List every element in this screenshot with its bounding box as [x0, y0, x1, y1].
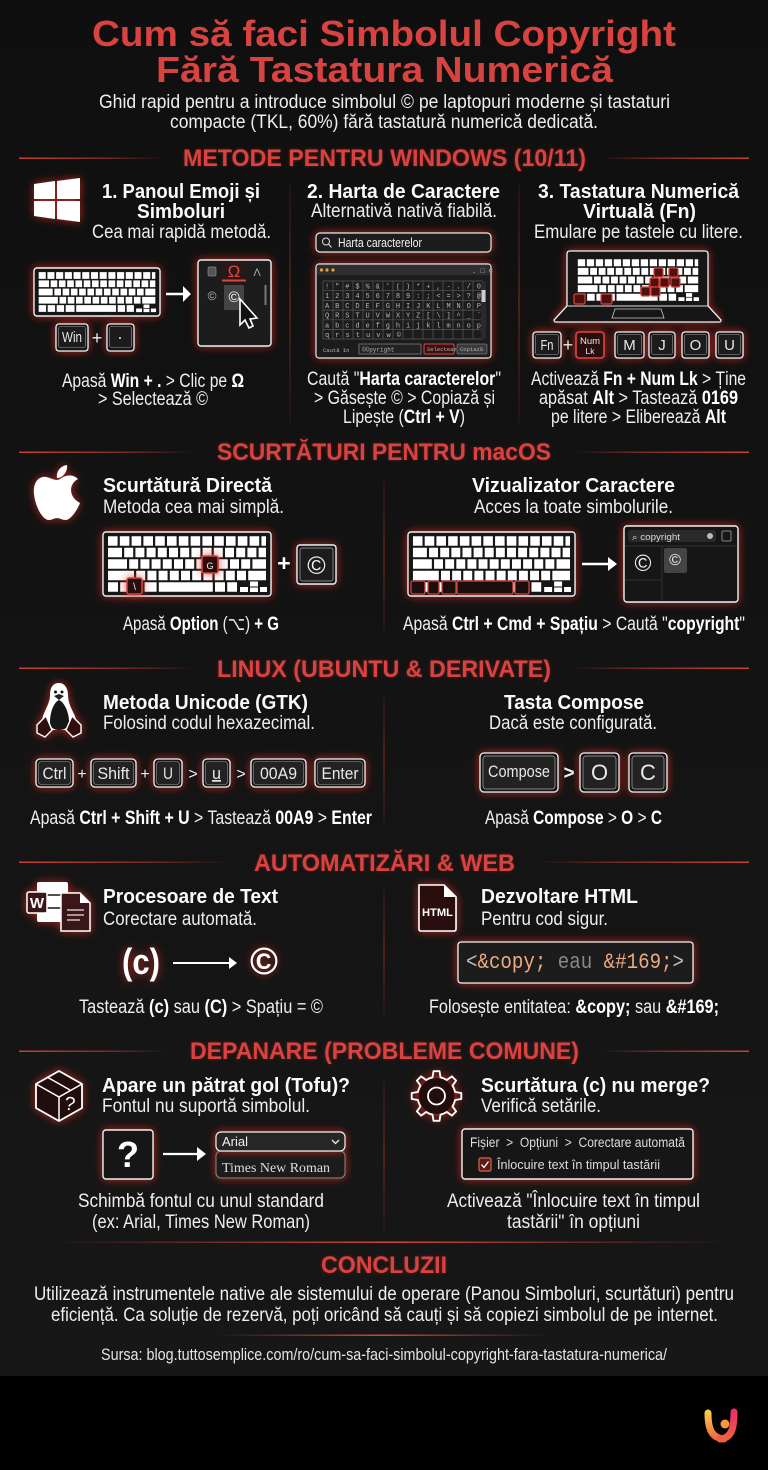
- keys: Ctrl Shift U u 00A9 Enter: [36, 759, 365, 787]
- Compose heading: Tasta Compose: [504, 692, 644, 714]
- tofu square: [103, 1130, 153, 1179]
- direct shortcut heading: Metoda cea mai simplă.: [103, 497, 284, 518]
- instruction: Unicode: Apasă Ctrl + Shift + U > Tastează 00A9 > Enter: [30, 808, 372, 829]
- tofu heading: Apare un pătrat gol (Tofu)?: [102, 1075, 350, 1097]
- emoji panel: Ω: [228, 262, 240, 281]
- HTML heading: [481, 886, 638, 930]
- keys: Fn + Num Lk M J O U: M: [623, 337, 636, 354]
- keyboard illustration: [34, 268, 160, 316]
- character map window: qrstuvw©: [325, 331, 402, 340]
- keys: Ctrl Shift U u 00A9 Enter: >: [236, 766, 246, 783]
- word processors heading: Corectare automată.: [103, 909, 257, 930]
- subtitle: compacte (TKL, 60%) fără tastatură numerică dedicată.: [170, 112, 598, 133]
- code box: <&copy; eau &#169;>: [466, 950, 684, 975]
- tofu heading: [102, 1075, 350, 1117]
- tofu square: ?: [117, 1134, 139, 1175]
- keys: Ctrl Shift U u 00A9 Enter: Enter: [322, 764, 359, 783]
- conclusions text: [34, 1284, 734, 1326]
- method 3 heading: [534, 181, 743, 243]
- keys: Fn + Num Lk M J O U: +: [563, 335, 573, 355]
- settings box: Înlocuire text în timpul tastării: [496, 1157, 660, 1172]
- icon: box with question mark: ?: [63, 1093, 76, 1116]
- panel: Windows: [19, 145, 749, 428]
- character viewer heading: [472, 475, 675, 518]
- source line: Sursa: blog.tuttosemplice.com/ro/cum-sa-faci-simbolul-copyright-fara-tastatura-numerica/: [101, 1346, 667, 1364]
- HTML heading: Pentru cod sigur.: [481, 909, 608, 930]
- instruction: tofu: Schimbă fontul cu unul standard: [78, 1191, 324, 1212]
- keyboard with Ctrl Cmd Space: [408, 532, 575, 596]
- instruction: HTML: Folosește entitatea: &copy; sau &#169;: [429, 997, 719, 1018]
- emoji panel: Λ: [253, 267, 261, 279]
- character map window: Copiază: [460, 346, 484, 353]
- subtitle: [99, 92, 670, 133]
- font dropdown: Arial: [222, 1134, 248, 1149]
- icon: cursor: [240, 299, 257, 328]
- character viewer panel: ⌕ copyright: [632, 532, 681, 542]
- character map window: QRSTUVWXYZ[\]^_`: [325, 312, 481, 321]
- instruction: settings: [447, 1190, 700, 1233]
- character map window: ABCDEFGHIJKLMNOP: [325, 303, 481, 311]
- panel: Linux: [19, 656, 749, 829]
- instruction: settings: tastării" în opțiuni: [507, 1212, 640, 1233]
- panel: macOS: [19, 438, 749, 635]
- method 2 heading: [307, 181, 500, 222]
- keys: Win + .: [56, 324, 134, 351]
- word processors heading: Procesoare de Text: [103, 886, 278, 908]
- keyboard with Option and G: G: [206, 561, 214, 571]
- instruction: Option + G: Apasă Option (⌥) + G: [123, 614, 279, 635]
- method 3 heading: 3. Tastatura Numerică: [538, 181, 740, 203]
- keys: Win + .: +: [92, 328, 102, 348]
- key: copyright: [297, 545, 336, 584]
- emoji panel: ©: [208, 289, 217, 303]
- keys: Fn + Num Lk M J O U: U: [724, 337, 735, 354]
- keyboard with Option and G: \: [133, 582, 136, 593]
- heading: Linux: LINUX (UBUNTU & DERIVATE): [217, 656, 551, 683]
- method 1 heading: 1. Panoul Emoji și: [102, 181, 260, 203]
- icon: Apple logo: [34, 465, 80, 520]
- settings box: Fișier > Opțiuni > Corectare automată: [470, 1135, 685, 1150]
- method 1 heading: [92, 181, 271, 243]
- character map window: abcdefghijklmnop: [325, 322, 481, 330]
- character map window: Caută în: [323, 347, 349, 354]
- keys: Ctrl Shift U u 00A9 Enter: +: [77, 766, 87, 783]
- icon: gear: [412, 1071, 461, 1121]
- instruction 2: Lipește (Ctrl + V): [343, 407, 465, 428]
- instruction: Ctrl Cmd Space: Apasă Ctrl + Cmd + Spațiu > Caută "copyright": [403, 614, 745, 635]
- character map window: 123456789:;<=>?@: [325, 293, 482, 301]
- arrow: [166, 286, 191, 302]
- autocorrect illustration: (c): [122, 941, 160, 982]
- settings box: [462, 1129, 693, 1179]
- Unicode method heading: Folosind codul hexazecimal.: [103, 713, 315, 734]
- character viewer panel: [624, 526, 738, 602]
- plus: +: [277, 550, 291, 576]
- keys: Ctrl Shift U u 00A9 Enter: u: [212, 764, 221, 783]
- direct shortcut heading: [103, 475, 284, 518]
- instruction 3: [531, 369, 746, 428]
- keys: Fn + Num Lk M J O U: Fn: [540, 337, 554, 354]
- keys: Win + .: Win: [62, 329, 82, 346]
- keys: Compose O C: C: [640, 760, 656, 785]
- keys: Fn + Num Lk M J O U: [533, 332, 743, 358]
- emoji panel: [198, 260, 271, 346]
- keys: Win + .: .: [118, 324, 122, 343]
- subtitle: Ghid rapid pentru a introduce simbolul © pe laptopuri moderne și tastaturi: [99, 92, 670, 113]
- arrow: [163, 1147, 206, 1161]
- keys: Ctrl Shift U u 00A9 Enter: +: [140, 766, 150, 783]
- keys: Fn + Num Lk M J O U: Lk: [586, 346, 595, 356]
- keys: Compose O C: O: [591, 760, 608, 785]
- keys: Ctrl Shift U u 00A9 Enter: 00A9: [260, 764, 297, 783]
- character viewer heading: Acces la toate simbolurile.: [474, 497, 673, 518]
- Unicode method heading: Metoda Unicode (GTK): [103, 692, 308, 714]
- search box: Harta caracterelor: [338, 235, 423, 250]
- autocorrect fix heading: [481, 1075, 710, 1117]
- tofu heading: Fontul nu suportă simbolul.: [102, 1096, 310, 1117]
- keys: Ctrl Shift U u 00A9 Enter: >: [188, 766, 198, 783]
- instruction 2: [307, 369, 501, 428]
- font dropdown: [216, 1132, 345, 1178]
- instruction: autocorrect: Tastează (c) sau (C) > Spațiu = ©: [79, 997, 323, 1018]
- search box: [316, 233, 491, 252]
- word processors heading: [103, 886, 278, 930]
- keys: Compose O C: [480, 753, 667, 792]
- icon: Word and document: W: [30, 895, 45, 912]
- title: [92, 13, 676, 90]
- font dropdown: Times New Roman: [222, 1161, 330, 1176]
- title: Cum să faci Simbolul Copyright: [92, 13, 676, 54]
- method 3 heading: Virtuală (Fn): [583, 201, 696, 223]
- character map window: ©©pyright: [362, 346, 394, 354]
- keys: Fn + Num Lk M J O U: J: [658, 337, 666, 354]
- panel: Troubleshooting: [19, 1038, 749, 1233]
- character map window: Selectează: [427, 346, 461, 353]
- icon: HTML file: [419, 885, 456, 931]
- autocorrect fix heading: Verifică setările.: [481, 1096, 601, 1117]
- autocorrect illustration: [122, 941, 278, 983]
- instruction: settings: Activează "Înlocuire text în timpul: [447, 1190, 700, 1212]
- heading: Automation: AUTOMATIZĂRI & WEB: [254, 849, 515, 877]
- icon: Tux penguin: [37, 683, 81, 737]
- Compose heading: Dacă este configurată.: [489, 713, 657, 734]
- heading: macOS: SCURTĂTURI PENTRU macOS: [217, 438, 551, 466]
- instruction 1: Apasă Win + . > Clic pe Ω: [62, 371, 244, 392]
- heading: Windows: METODE PENTRU WINDOWS (10/11): [183, 145, 586, 172]
- character viewer heading: Vizualizator Caractere: [472, 475, 675, 497]
- keys: Ctrl Shift U u 00A9 Enter: Shift: [98, 764, 130, 783]
- instruction: tofu: [78, 1191, 324, 1233]
- character viewer panel: ©: [669, 552, 681, 569]
- character map window: !"#$%&'()*+,-./0: [325, 284, 481, 292]
- instruction: tofu: (ex: Arial, Times New Roman): [92, 1212, 310, 1233]
- icon: Word and document: [27, 882, 90, 931]
- panel: Automation and web: [19, 849, 749, 1018]
- autocorrect fix heading: Scurtătura (c) nu merge?: [481, 1075, 710, 1097]
- code box: [458, 942, 693, 983]
- instruction 2: Caută "Harta caracterelor": [307, 369, 501, 390]
- laptop illustration: [554, 251, 721, 322]
- heading: Troubleshooting: DEPANARE (PROBLEME COMUNE): [190, 1038, 579, 1065]
- keys: Ctrl Shift U u 00A9 Enter: Ctrl: [42, 764, 66, 783]
- conclusions: [34, 1252, 734, 1326]
- method 1 heading: Simboluri: [137, 201, 225, 223]
- keys: Compose O C: >: [563, 763, 575, 784]
- method 2 heading: Alternativă nativă fiabilă.: [311, 201, 497, 222]
- character viewer panel: ©: [635, 550, 652, 576]
- method 1 heading: Cea mai rapidă metodă.: [92, 222, 271, 243]
- icon: Windows logo: [34, 178, 80, 222]
- direct shortcut heading: Scurtătură Directă: [103, 475, 273, 497]
- instruction 3: pe litere > Eliberează Alt: [551, 407, 727, 428]
- autocorrect illustration: ©: [250, 941, 278, 983]
- instruction 3: Activează Fn + Num Lk > Ține: [531, 369, 746, 390]
- instruction 3: apăsat Alt > Tastează 0169: [539, 388, 738, 409]
- icon: box with question mark: [36, 1071, 82, 1121]
- title: Fără Tastatura Numerică: [156, 49, 614, 90]
- emoji panel: ©: [228, 289, 240, 306]
- character map window: . □ ¢: [472, 268, 493, 276]
- highlighted keys: [574, 268, 680, 304]
- HTML heading: Dezvoltare HTML: [481, 886, 638, 908]
- icon: HTML file: HTML: [422, 907, 453, 919]
- keys: Ctrl Shift U u 00A9 Enter: U: [163, 764, 173, 783]
- instruction 2: > Găsește © > Copiază și: [314, 388, 495, 409]
- logo: [708, 1412, 734, 1439]
- character map window: [316, 264, 493, 358]
- method 3 heading: Emulare pe tastele cu litere.: [534, 222, 743, 243]
- arrow: [582, 557, 617, 571]
- keyboard with Option and G: [103, 532, 271, 596]
- Unicode method heading: [103, 692, 315, 734]
- heading: conclusions: CONCLUZII: [321, 1252, 447, 1279]
- keys: Compose O C: Compose: [488, 762, 550, 781]
- keys: Fn + Num Lk M J O U: Num: [580, 336, 600, 347]
- instruction 1: [62, 371, 244, 410]
- instruction: Compose: Apasă Compose > O > C: [485, 808, 662, 829]
- key: copyright: ©: [307, 552, 326, 580]
- instruction 1: > Selectează ©: [98, 389, 208, 410]
- Compose heading: [489, 692, 657, 734]
- method 2 heading: 2. Harta de Caractere: [307, 181, 500, 203]
- keys: Fn + Num Lk M J O U: O: [690, 337, 701, 354]
